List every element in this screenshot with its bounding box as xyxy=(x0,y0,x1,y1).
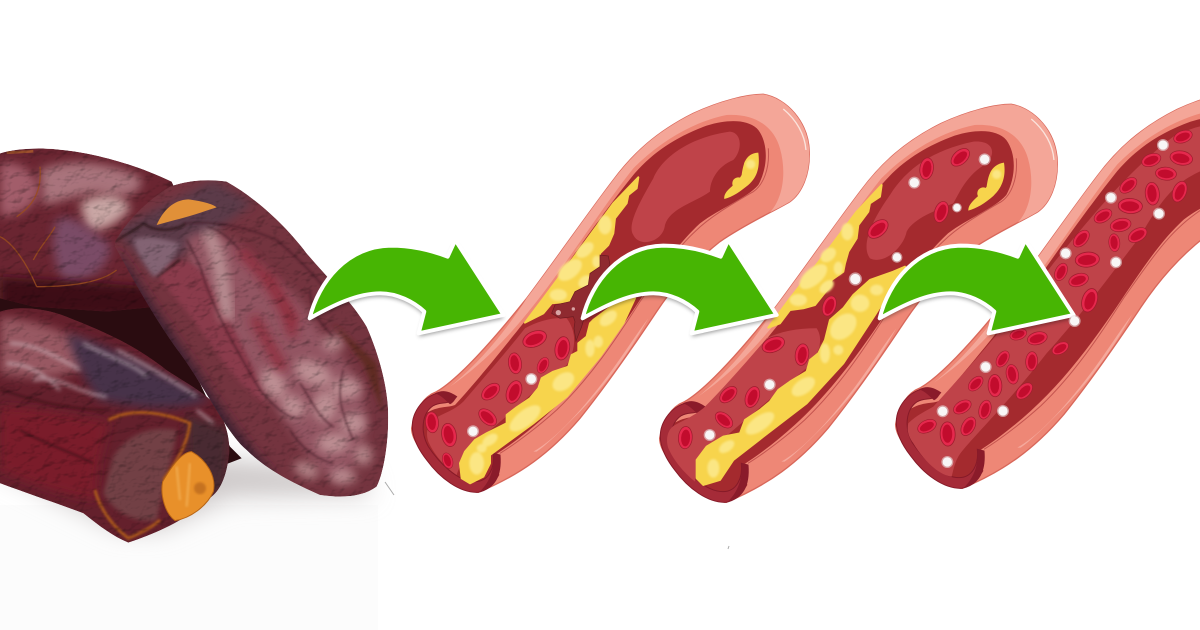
arrow 1: dates to artery 1 xyxy=(310,240,504,337)
date: bottom left xyxy=(0,303,233,547)
icon: date stem top xyxy=(157,199,217,225)
plaque: far end xyxy=(968,163,1005,211)
date: front right xyxy=(110,173,393,503)
artery 1: heavy plaque with clot xyxy=(412,94,809,492)
artery 3: clear with many blood cells xyxy=(896,90,1200,488)
clot xyxy=(552,255,610,341)
soft shadow under dates xyxy=(0,440,372,530)
red blood cells xyxy=(425,327,572,470)
illustration: dates clearing arteries xyxy=(0,94,1200,550)
artery 2: moderate plaque xyxy=(660,104,1057,502)
white blood cells xyxy=(704,153,991,441)
white blood cells xyxy=(937,139,1169,468)
panel: dates photo xyxy=(0,143,729,630)
plaque: upper wall xyxy=(768,185,882,328)
white blood cells xyxy=(467,373,537,437)
date: top left xyxy=(0,148,174,312)
icon: date stem end xyxy=(162,452,214,521)
arrow 3: artery 2 to artery 3 xyxy=(880,240,1074,337)
plaque: lower wall xyxy=(697,267,905,485)
dark gap between dates xyxy=(0,290,242,467)
red blood cells xyxy=(915,128,1194,446)
arrow 2: artery 1 to artery 2 xyxy=(583,240,777,337)
plaque: lower wall xyxy=(460,298,635,483)
floor tone xyxy=(0,505,378,630)
red blood cells xyxy=(678,145,973,449)
white blood cell over arrow 3 tip xyxy=(1069,315,1081,327)
plaque: upper wall xyxy=(525,177,638,323)
plaque: far end xyxy=(724,153,759,199)
